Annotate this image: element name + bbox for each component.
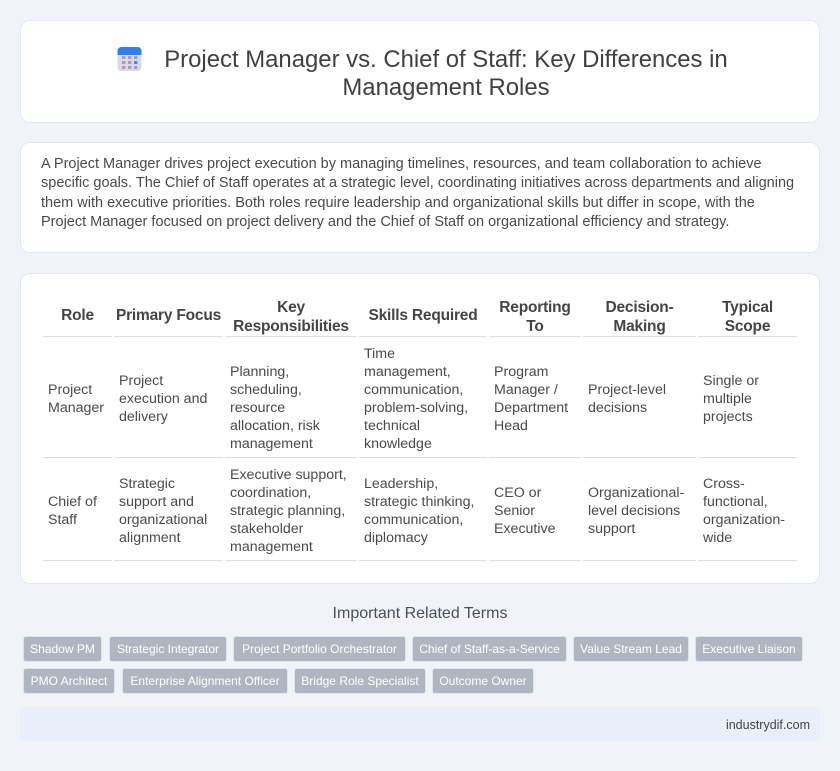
cell: reporting: CEO or (494, 485, 541, 501)
cell: skills: communication, (364, 382, 463, 398)
tag: PMO Architect (31, 674, 107, 688)
cell: role: Chief of (48, 494, 97, 510)
tag: Enterprise Alignment Officer (130, 674, 280, 688)
cell: role (48, 494, 97, 528)
header: Decision-Making (606, 299, 674, 335)
cell: decisions: level decisions (588, 503, 680, 519)
cell: decisions (588, 485, 684, 537)
cell: focus: delivery (119, 409, 168, 425)
header: Reporting To: Reporting (499, 299, 571, 316)
header: Reporting To: To (526, 318, 544, 335)
cell: reporting (494, 364, 568, 434)
footer source: industrydif.com (726, 718, 810, 732)
tag (412, 636, 567, 662)
tag (695, 636, 803, 662)
cell: scope: Cross- (703, 476, 745, 492)
cell: responsibilities: Planning, (230, 364, 289, 380)
header: Typical Scope: Scope (725, 318, 770, 335)
cell: skills (364, 346, 468, 452)
cell: scope (703, 373, 759, 425)
tag (233, 636, 406, 662)
cell: skills: problem-solving, (364, 400, 468, 416)
cell: skills: diplomacy (364, 530, 428, 546)
row: Project Manager (48, 346, 759, 452)
intro text: Project Manager focused on project delivery and the Chief of Staff on organizational efficiency and strategy. (41, 214, 729, 230)
tag: Executive Liaison (702, 642, 796, 656)
tag (23, 668, 115, 694)
cell: role: Staff (48, 512, 77, 528)
cell: reporting: Department (494, 400, 568, 416)
cell: responsibilities: management (230, 436, 313, 452)
tag: Outcome Owner (439, 674, 527, 688)
cell: focus (119, 476, 207, 546)
cell: decisions: support (588, 521, 635, 537)
icon: calendar (118, 47, 142, 71)
header: Decision-Making: Making (613, 318, 666, 335)
title (164, 46, 728, 101)
header card (20, 20, 820, 123)
title: Management Roles (342, 74, 550, 101)
cell: skills: Time (364, 346, 395, 362)
tag (23, 636, 102, 662)
header: Skills Required: Skills Required (368, 307, 477, 324)
cell: scope: multiple (703, 391, 752, 407)
cell: responsibilities: allocation, risk (230, 418, 320, 434)
cell: focus: Project (119, 373, 163, 389)
header: Role: Role (61, 307, 94, 324)
cell: role: Manager (48, 400, 104, 416)
cell: skills: communication, (364, 512, 463, 528)
cell: responsibilities: strategic planning, (230, 503, 345, 519)
cell: responsibilities: scheduling, (230, 382, 302, 398)
row: Chief of Staff (48, 467, 785, 555)
header: Primary Focus: Primary Focus (116, 307, 221, 324)
header: Reporting To (499, 299, 571, 335)
cell: skills: knowledge (364, 436, 432, 452)
footer bar (20, 707, 820, 741)
cell: decisions (588, 382, 666, 416)
cell: reporting: Executive (494, 521, 556, 537)
tag (432, 668, 534, 694)
cell: scope: Single or (703, 373, 759, 389)
cell: reporting: Manager / (494, 382, 558, 398)
header: Typical Scope (722, 299, 773, 335)
cell: responsibilities (230, 364, 320, 452)
cell: focus: execution and (119, 391, 207, 407)
cell: role (48, 382, 104, 416)
tag: Project Portfolio Orchestrator (242, 642, 397, 656)
cell: responsibilities: stakeholder (230, 521, 303, 537)
tag: Value Stream Lead (580, 642, 682, 656)
cell: responsibilities: coordination, (230, 485, 311, 501)
header: Key Responsibilities: Responsibilities (233, 318, 349, 335)
cell: skills (364, 476, 474, 546)
cell: scope: projects (703, 409, 753, 425)
tag: Chief of Staff-as-a-Service (419, 642, 560, 656)
cell: focus: Strategic (119, 476, 175, 492)
intro text: them with executive priorities. Both roles require leadership and organizational skills but differ in scope, with the (41, 195, 755, 211)
cell: decisions: decisions (588, 400, 647, 416)
cell: focus: support and (119, 494, 194, 510)
cell: focus: alignment (119, 530, 181, 546)
cell: reporting (494, 485, 556, 537)
cell: scope (703, 476, 785, 546)
cell: skills: Leadership, (364, 476, 438, 492)
cell: responsibilities: resource (230, 400, 285, 416)
tag: Bridge Role Specialist (301, 674, 419, 688)
cell: skills: technical (364, 418, 420, 434)
cell: scope: functional, (703, 494, 768, 510)
cell: focus (119, 373, 207, 425)
tag (122, 668, 288, 694)
cell: reporting: Program (494, 364, 548, 380)
title: Project Manager vs. Chief of Staff: Key Differences in (164, 46, 728, 73)
header: Key Responsibilities: Key (277, 299, 305, 316)
tag (573, 636, 689, 662)
cell: reporting: Senior (494, 503, 535, 519)
cell: focus: organizational (119, 512, 207, 528)
related terms heading: Important Related Terms (333, 605, 507, 622)
tag (294, 668, 426, 694)
cell: reporting: Head (494, 418, 528, 434)
intro text: A Project Manager drives project execution by managing timelines, resources, and team collaboration to achieve (41, 156, 762, 172)
tag: Strategic Integrator (117, 642, 219, 656)
cell: decisions: Project-level (588, 382, 666, 398)
intro text (41, 156, 794, 230)
tag: Shadow PM (30, 642, 95, 656)
tag (109, 636, 227, 662)
cell: scope: wide (703, 530, 732, 546)
intro paragraph card (20, 142, 820, 253)
cell: decisions: Organizational- (588, 485, 684, 501)
cell: scope: organization- (703, 512, 785, 528)
header: Key Responsibilities (233, 299, 349, 335)
cell: responsibilities: Executive support, (230, 467, 347, 483)
intro text: specific goals. The Chief of Staff operates at a strategic level, coordinating initiatives across departments and aligning (41, 175, 794, 191)
cell: responsibilities (230, 467, 347, 555)
cell: responsibilities: management (230, 539, 313, 555)
header: Decision-Making: Decision- (606, 299, 673, 316)
cell: role: Project (48, 382, 92, 398)
cell: skills: strategic thinking, (364, 494, 474, 510)
cell: skills: management, (364, 364, 451, 380)
comparison table card (20, 273, 820, 584)
header: Typical Scope: Typical (722, 299, 773, 316)
